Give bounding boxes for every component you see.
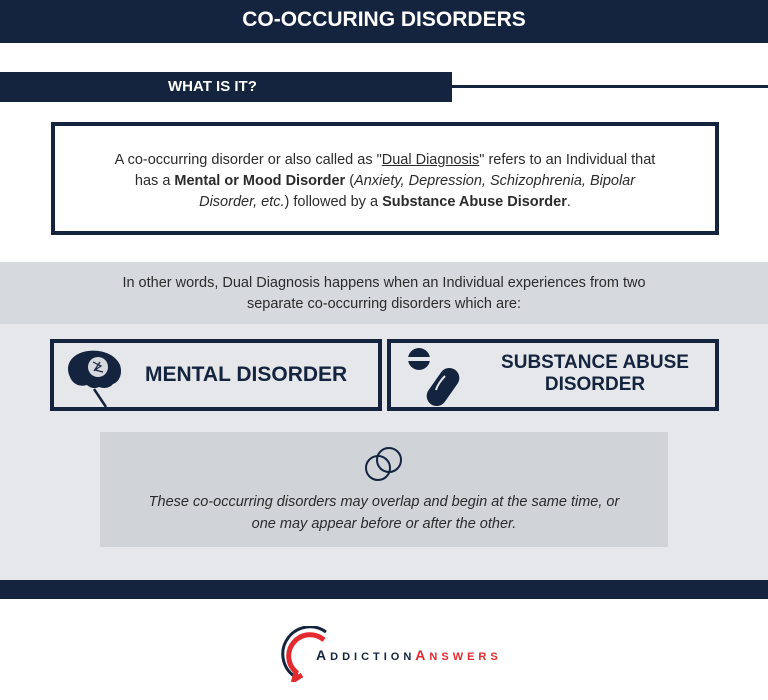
label xyxy=(501,352,689,395)
label: DISORDER xyxy=(545,374,645,395)
section heading: what is it: WHAT IS IT? xyxy=(168,78,257,95)
icon: pills xyxy=(408,348,460,406)
definition box: Disorder, etc.) followed by a Substance Abuse Disorder. xyxy=(199,194,571,210)
section heading: what is it xyxy=(0,72,452,102)
text xyxy=(149,494,620,532)
box: substance abuse xyxy=(387,339,719,411)
light gray panel xyxy=(0,324,768,580)
box: mental disorder xyxy=(50,339,382,411)
text: These co-occurring disorders may overlap and begin at the same time, or xyxy=(149,494,619,510)
definition box: A co-occurring disorder or also called as "Dual Diagnosis" refers to an Individual that xyxy=(115,152,655,168)
logo: ADDICTIONANSWERS xyxy=(316,647,502,663)
in other words band: In other words, Dual Diagnosis happens when an Individual experiences from two xyxy=(122,275,646,291)
label: MENTAL DISORDER xyxy=(145,363,347,386)
in other words band xyxy=(0,262,768,324)
text: one may appear before or after the other. xyxy=(252,516,516,532)
logo xyxy=(281,626,502,682)
icon: brain xyxy=(68,350,121,407)
footer bar xyxy=(0,580,768,599)
definition box: has a Mental or Mood Disorder (Anxiety, Depression, Schizophrenia, Bipolar xyxy=(135,173,635,189)
definition box xyxy=(51,122,719,235)
title bar xyxy=(0,0,768,43)
title bar: CO-OCCURING DISORDERS xyxy=(242,8,526,31)
overlap note box xyxy=(100,432,668,547)
in other words band: separate co-occurring disorders which are: xyxy=(247,296,521,312)
label: SUBSTANCE ABUSE xyxy=(501,352,689,373)
icon: overlapping circles xyxy=(365,447,402,481)
